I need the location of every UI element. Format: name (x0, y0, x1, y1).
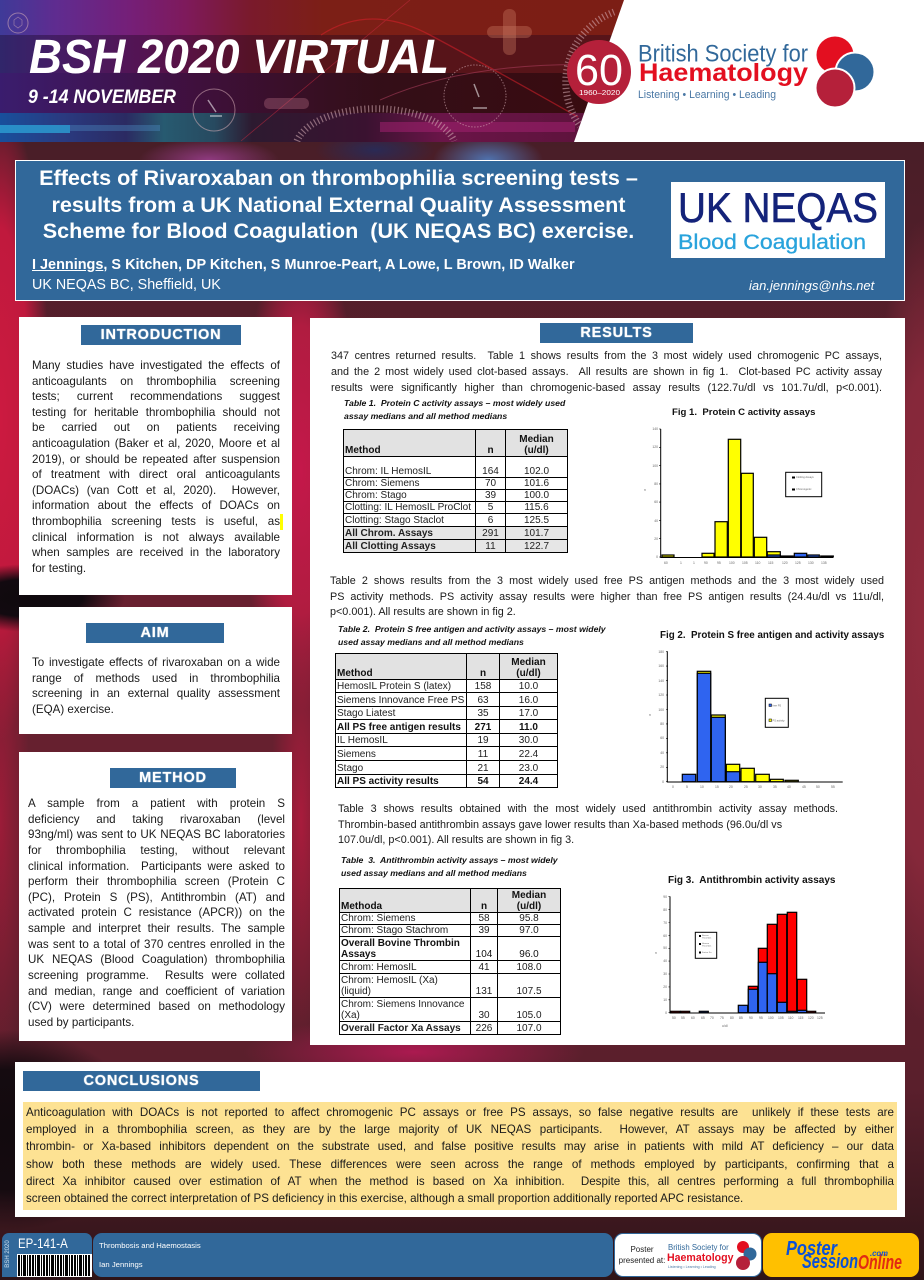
heading: aim (86, 623, 224, 643)
table 2: 16.0 (519, 695, 538, 706)
chart: figure 3 histogram: 55 (681, 1016, 685, 1020)
chart: figure 1 histogram: 80 (654, 482, 658, 486)
results paragraph 1: results were significantly higher than chromogenic-based assay results (122.7u/dl vs 101.7u/dl, p<0.001). (331, 382, 882, 394)
table 3: 104 (476, 949, 492, 960)
table 3: 95.8 (519, 913, 539, 924)
results paragraph 3: 107.0u/dl, p<0.001). All results are shown in fig 3. (338, 834, 574, 846)
chart: figure 1 histogram (644, 427, 834, 565)
highlight mark (280, 514, 283, 530)
poster title: Effects of Rivaroxaban on thrombophilia screening tests – (39, 165, 638, 190)
table 1: 291 (482, 528, 499, 539)
table 1: (u/dl) (524, 445, 549, 456)
introduction text: thrombophilia screening tests is useful, as (32, 515, 280, 528)
results paragraph 3: Thrombin-based antithrombin assays gave lower results than Xa-based methods (96.0u/dl vs (338, 818, 782, 830)
heading: introduction (81, 325, 241, 345)
email: ian.jennings@nhs.net (749, 278, 874, 293)
poster ID and barcode block: EP-141-A (18, 1236, 68, 1251)
chart: figure 3 histogram: 85 (739, 1016, 743, 1020)
chart: figure 2 histogram: 10 (700, 785, 704, 789)
table 2: Stago Liatest (337, 708, 395, 719)
chart: figure 3 histogram: 105 (778, 1016, 784, 1020)
chart: figure 3 histogram: 90 (663, 895, 667, 899)
introduction text: be carried out on patients receiving (32, 421, 280, 434)
results paragraph 2 (330, 575, 884, 618)
table 1: Clotting: Stago Staclot (345, 515, 444, 526)
table 2: 11.0 (519, 722, 538, 733)
UK NEQAS logo (671, 182, 885, 258)
conclusions text on yellow box: employed in a thrombophilia screen, as they are by the large majority of UK NEQAS participants. However, AT assays may be affected by either (26, 1123, 894, 1136)
table 2: 271 (475, 722, 491, 733)
table 1: 164 (482, 466, 499, 477)
results paragraph 2: Table 2 shows results from the 3 most widely used free PS antigen methods and the 3 most widely used (330, 575, 884, 587)
chart: figure 3 histogram: 10 (663, 998, 667, 1002)
introduction text: testing for heritable thrombophilia should not (32, 406, 280, 419)
chart: figure 1 histogram: 20 (654, 537, 658, 541)
table 1 caption: Table 1. Protein C activity assays – most widely used (344, 398, 565, 408)
chart: figure 3 histogram: 60 (663, 934, 667, 938)
chart: figure 2 histogram: PS activity (772, 718, 785, 722)
heading: introduction: INTRODUCTION (101, 327, 221, 343)
chart: figure 1 histogram: 110 (755, 561, 761, 565)
chart: figure 3 histogram: Bovine (702, 935, 709, 937)
chart: figure 3 histogram: Thrombin (702, 944, 712, 948)
method text: UK NEQAS (Blood Coagulation) thrombophilia (28, 953, 285, 966)
table 1: 11 (485, 541, 496, 552)
chart: figure 1 histogram: n (644, 488, 646, 492)
table 3: 107.5 (516, 986, 542, 997)
chart: figure 3 histogram (655, 895, 825, 1028)
chart: figure 2 histogram: 60 (660, 736, 664, 740)
chart: figure 2 histogram: 40 (660, 751, 664, 755)
method text: 93ng/ml) was sent to UK NEQAS BC laboratories (28, 828, 285, 841)
table 2: Stago (337, 763, 363, 774)
conclusions text on yellow box: thrombin- or Xa-based inhibitors dependent on the substrate used, and false positive results may arise in patients with mild AT deficiency – our data (26, 1140, 894, 1153)
chart: figure 2 histogram: 20 (660, 765, 664, 769)
table 2: Median (511, 656, 546, 668)
introduction text: clinical information is not always available (32, 531, 280, 544)
table 2: All PS free antigen results (337, 722, 461, 733)
chart: figure 2 histogram: 140 (658, 679, 664, 683)
table 1: 125.5 (524, 515, 549, 526)
chart: figure 3 histogram: 90 (749, 1016, 753, 1020)
BSH logo text: Haematology (639, 59, 808, 87)
method text: (PC), Protein S (PS), Antithrombin (AT) and (28, 891, 285, 904)
chart: figure 3 histogram: Human (702, 943, 710, 945)
chart: figure 2 histogram: 15 (715, 785, 719, 789)
BSH 60 years badge (567, 40, 631, 104)
method text: activated protein C resistance (APCR)) on the (28, 906, 285, 919)
chart: figure 2 histogram: 45 (802, 785, 806, 789)
BSH logo blobs (816, 36, 874, 108)
panel: introduction (19, 317, 292, 595)
poster presented at BSH box: Listening • Learning • Leading (668, 1265, 716, 1269)
BSH logo text: British Society for (638, 40, 808, 68)
event date: 9 -14 NOVEMBER (28, 86, 176, 108)
table 2 caption: Table 2. Protein S free antigen and activity assays – most widely (338, 624, 606, 634)
BSH 60 years badge: 60 (575, 46, 623, 95)
conclusions text on yellow box: Anticoagulation with DOACs is not reported to affect chromogenic PC assays or free PS assays, so false negative results are unlikely if these tests are (26, 1106, 894, 1119)
table 1: 101.7 (524, 528, 549, 539)
table 3: 108.0 (516, 962, 542, 973)
table 2: 17.0 (519, 708, 538, 719)
chart: figure 1 histogram: 120 (652, 445, 658, 449)
table 1: All Chrom. Assays (345, 528, 433, 539)
affiliation: UK NEQAS BC, Sheffield, UK (32, 277, 221, 293)
heading: results: RESULTS (580, 325, 653, 341)
poster title: Scheme for Blood Coagulation (UK NEQAS BC) exercise. (43, 218, 634, 243)
table 1: 5 (488, 502, 493, 513)
introduction text (32, 359, 280, 575)
table 3: Chrom: Siemens Innovance (341, 999, 464, 1010)
heading: aim: AIM (140, 625, 169, 641)
table 2: 23.0 (519, 763, 538, 774)
table 2: n (480, 668, 486, 678)
chart: figure 3 histogram: 80 (663, 908, 667, 912)
method text (28, 797, 285, 1029)
table 3 caption (341, 855, 558, 878)
method text: perform their thrombophilia screen (Protein C (28, 875, 285, 888)
chart: figure 1 histogram: 1 (693, 561, 695, 565)
chart: figure 1 histogram: 130 (808, 561, 814, 565)
table 1: 39 (485, 490, 496, 501)
chart: figure 2 histogram: 20 (729, 785, 733, 789)
heading: conclusions (23, 1071, 260, 1091)
chart: figure 2 histogram: 30 (758, 785, 762, 789)
table 3: 131 (476, 986, 492, 997)
table 3: Chrom: HemosIL (Xa) (341, 975, 438, 986)
table 2: 21 (477, 763, 489, 774)
table 3: 97.0 (519, 925, 539, 936)
heading: method (110, 768, 236, 788)
BSH logo text (638, 40, 808, 101)
introduction text: anticoagulants on thrombophilia screening (32, 375, 280, 388)
aim text: To investigate effects of rivaroxaban on a wide (32, 656, 280, 669)
panel: results (310, 318, 905, 1045)
chart: figure 3 histogram: 70 (710, 1016, 714, 1020)
aim text: (EQA) exercise. (32, 703, 114, 716)
poster presented at BSH box: Poster (630, 1245, 654, 1254)
poster title: results from a UK National External Quality Assessment (51, 192, 626, 216)
poster presented at BSH box: British Society for (668, 1243, 729, 1252)
chart: figure 2 histogram (649, 650, 843, 789)
introduction text: information about the effects of DOACs on (32, 499, 280, 512)
table 3: Chrom: HemosIL (341, 962, 417, 973)
table 3: 107.0 (516, 1023, 542, 1034)
table 3: 105.0 (516, 1010, 542, 1021)
table 2: IL HemosIL (337, 735, 388, 746)
chart: figure 3 histogram: 115 (798, 1016, 804, 1020)
poster presented at BSH box: presented at: (619, 1256, 665, 1265)
introduction text: anticoagulation (Baker et al, 2020, Moore et al (32, 437, 280, 450)
table 2 caption: used assay medians and all method medians (338, 637, 524, 647)
chart: figure 2 histogram: 25 (744, 785, 748, 789)
table 2: 63 (477, 695, 489, 706)
PosterSessionOnline logo: Poster (786, 1238, 838, 1260)
chart: figure 3 histogram: 95 (759, 1016, 763, 1020)
decorative science icons (8, 0, 614, 141)
chart: figure 3 histogram: 75 (720, 1016, 724, 1020)
table 3 caption: used assay medians and all method medians (341, 868, 527, 878)
BSH 60 years badge: 1960–2020 (579, 88, 620, 97)
results paragraph 2: p<0.001). All results are shown in fig 2. (330, 606, 516, 618)
table 3: Overall Bovine Thrombin Assays (341, 938, 460, 960)
chart: figure 1 histogram: 1 (680, 561, 682, 565)
authors: I Jennings, S Kitchen, DP Kitchen, S Munroe-Peart, A Lowe, L Brown, ID Walker (32, 257, 575, 273)
table 2: Siemens (337, 749, 376, 760)
chart: figure 1 histogram: 135 (821, 561, 827, 565)
chart: figure 3 histogram: 120 (808, 1016, 814, 1020)
PosterSessionOnline logo: .com (870, 1249, 888, 1258)
PosterSessionOnline logo: Session (802, 1251, 858, 1273)
table 1: Median (519, 434, 554, 445)
chart: figure 1 histogram: 90 (704, 561, 708, 565)
chart: figure 3 histogram: 110 (788, 1016, 794, 1020)
results paragraph 3: Table 3 shows results obtained with the most widely used antithrombin activity assay methods. (338, 803, 838, 815)
PosterSessionOnline logo (763, 1233, 919, 1277)
chart: figure 3 histogram: Thrombin (702, 936, 712, 940)
chart: figure 2 histogram: 180 (658, 650, 664, 654)
chart: figure 2 histogram: free PS (772, 704, 781, 708)
poster presented at BSH box: Haematology (667, 1252, 734, 1264)
panel: conclusions (15, 1062, 905, 1217)
table 2: 19 (477, 735, 489, 746)
conclusions text on yellow box: screen obtained the correct interpretation of PS deficiency in this exercise, although a small proportion additionally reported APC resistance. (26, 1192, 743, 1205)
chart: figure 2 histogram: 40 (787, 785, 791, 789)
chart: figure 1 histogram: 100 (729, 561, 735, 565)
table 3: 41 (478, 962, 490, 973)
table 2: 158 (475, 681, 491, 692)
chart: figure 2 histogram: 120 (658, 693, 664, 697)
table 2: All PS activity results (337, 776, 439, 787)
table 2: Method (337, 668, 373, 678)
aim text (32, 656, 280, 716)
table 1: 115.6 (524, 502, 549, 513)
aim text: screening in an external quality assessment (32, 687, 280, 700)
method text: screening programme. Results were collated (28, 969, 285, 982)
table 2: Siemens Innovance Free PS (337, 695, 464, 706)
introduction text: of treatment with direct oral anticoagulants (32, 468, 280, 481)
table 3: 30 (478, 1010, 490, 1021)
table 2: 35 (477, 708, 489, 719)
chart: figure 1 histogram: 40 (654, 519, 658, 523)
introduction text: Many studies have investigated the effects of (32, 359, 280, 372)
chart: figure 1 histogram: 115 (768, 561, 774, 565)
table 3: 58 (478, 913, 490, 924)
chart: figure 1 histogram: 140 (652, 427, 658, 431)
poster ID and barcode block: BSH 2020 (5, 1240, 11, 1268)
heading: method: METHOD (139, 770, 207, 786)
chart: figure 2 histogram: 100 (658, 708, 664, 712)
introduction text: (DOACs) (van Cott et al, 2020). However, (32, 484, 280, 497)
figure 3 title: Fig 3. Antithrombin activity assays (668, 875, 835, 886)
table 1 (343, 429, 568, 553)
method text: clinical information. Participants were asked to (28, 860, 285, 873)
table 1: 6 (488, 515, 493, 526)
table 3: (Xa) (341, 1010, 360, 1021)
chart: figure 3 histogram: Factor Xa (702, 951, 712, 954)
chart: figure 3 histogram: 20 (663, 985, 667, 989)
footer bar (2, 1233, 919, 1277)
table 3: Median (512, 890, 546, 901)
table 1: 122.7 (524, 541, 549, 552)
method text: A sample from a patient with protein S (28, 797, 285, 810)
panel: method (19, 752, 292, 1041)
chart: figure 2 histogram: 50 (816, 785, 820, 789)
PosterSessionOnline logo: Online (858, 1252, 902, 1274)
chart: figure 1 histogram: 105 (742, 561, 748, 565)
table 2: 24.4 (519, 776, 538, 787)
topic and author bar: Thrombosis and Haemostasis (99, 1241, 201, 1250)
introduction text: tests; current recommendations suggest (32, 390, 280, 403)
chart: figure 3 histogram: 0 (665, 1011, 667, 1015)
table 3: Methoda (341, 901, 382, 912)
table 1: n (487, 445, 494, 456)
method text: (CV) were determined based on methodology (28, 1000, 285, 1013)
method text: deficiency and taking rivaroxaban (level (28, 813, 285, 826)
table 1 caption: assay medians and all method medians (344, 411, 507, 421)
heading: results (540, 323, 693, 343)
topic and author bar: Ian Jennings (99, 1260, 143, 1269)
chart: figure 3 histogram: 60 (691, 1016, 695, 1020)
table 1: 102.0 (524, 466, 549, 477)
poster ID and barcode block (2, 1233, 92, 1277)
conclusions text on yellow box (23, 1102, 897, 1210)
table 3: 39 (478, 925, 490, 936)
chart: figure 2 histogram: 5 (686, 785, 688, 789)
poster title (39, 165, 638, 243)
chart: figure 3 histogram: n (655, 951, 657, 955)
table 2: 22.4 (519, 749, 538, 760)
chart: figure 1 histogram: 120 (782, 561, 788, 565)
chart: figure 2 histogram: 0 (672, 785, 674, 789)
chart: figure 3 histogram: 65 (701, 1016, 705, 1020)
table 1: Chrom: Siemens (345, 478, 419, 489)
white logo area (574, 0, 924, 142)
chart: figure 1 histogram: 0 (656, 555, 658, 559)
table 3: Chrom: Siemens (341, 913, 415, 924)
table 2: 30.0 (519, 735, 538, 746)
chart: figure 3 histogram: 50 (672, 1016, 676, 1020)
chart: figure 1 histogram: 125 (795, 561, 801, 565)
chart: figure 1 histogram: 95 (717, 561, 721, 565)
figure 2 title: Fig 2. Protein S free antigen and activity assays (660, 630, 884, 641)
conclusions text on yellow box: direct Xa inhibitor caused over estimation of AT when the method is based on Xa inhibition. Despite this, all centres performing a full thrombophilia (26, 1175, 894, 1188)
table 1: Clotting: IL HemosIL ProClot (345, 502, 471, 513)
table 2 caption (338, 624, 606, 647)
table 2: HemosIL Protein S (latex) (337, 681, 451, 692)
poster presented at BSH box (614, 1233, 762, 1277)
chart: figure 1 histogram: 60 (664, 561, 668, 565)
chart: figure 3 histogram: 70 (663, 921, 667, 925)
UK NEQAS logo: Blood Coagulation (678, 231, 866, 254)
chart: figure 2 histogram: 0 (662, 780, 664, 784)
panel: aim (19, 607, 292, 734)
conclusions text on yellow box: show both these methods are widely used. These differences were seen across the range of methods employed by participants, confirming that a (26, 1158, 894, 1171)
chart: figure 3 histogram: 80 (730, 1016, 734, 1020)
table 3: 96.0 (519, 949, 539, 960)
chart: figure 2 histogram: n (649, 713, 651, 717)
chart: figure 1 histogram: 100 (652, 464, 658, 468)
topic and author bar (93, 1233, 613, 1277)
chart: figure 2 histogram: 35 (773, 785, 777, 789)
introduction text: 2019), or should be repeated after suspension (32, 453, 280, 466)
results paragraph 3 (338, 803, 838, 846)
table 1: All Clotting Assays (345, 541, 436, 552)
results paragraph 1: 347 centres returned results. Table 1 shows results from the 3 most widely used chromogenic PC assays, (331, 350, 882, 362)
table 3: 226 (476, 1023, 492, 1034)
method text: used by participants. (28, 1016, 134, 1029)
title panel (15, 160, 905, 301)
results paragraph 1 (331, 350, 882, 394)
results paragraph 1: and the 2 most widely used clot-based assays. All results are shown in fig 1. Clot-based PC activity assay (331, 366, 882, 378)
chart: figure 3 histogram: 40 (663, 959, 667, 963)
chart: figure 2 histogram: 160 (658, 664, 664, 668)
chart: figure 2 histogram: 55 (831, 785, 835, 789)
figure 1 title: Fig 1. Protein C activity assays (672, 407, 815, 418)
event title: BSH 2020 VIRTUAL (29, 31, 449, 84)
chart: figure 2 histogram: 80 (660, 722, 664, 726)
table 3: (u/dl) (517, 901, 541, 912)
table 2: 54 (477, 776, 489, 787)
table 1: Method (345, 445, 381, 456)
table 1: 100.0 (524, 490, 549, 501)
method text: for thrombophilia testing, without relevant (28, 844, 285, 857)
introduction text: when samples are received in the laboratory (32, 546, 280, 559)
table 3 (339, 888, 561, 1035)
table 1 caption (344, 398, 566, 421)
table 3: (liquid) (341, 986, 371, 997)
table 2: 11 (478, 749, 488, 760)
method text: sample and interpret their results. The sample (28, 922, 285, 935)
results paragraph 2: PS activity methods. PS activity assay results were higher than free PS antigen results (24.4u/dl vs 11u/dl, (330, 591, 884, 603)
method text: and median, range and coefficient of variation (28, 985, 285, 998)
aim text: range of methods used in thrombophilia (32, 672, 280, 685)
table 3: n (481, 901, 487, 912)
table 1: Chrom: IL HemosIL (345, 466, 431, 477)
table 2: (u/dl) (516, 668, 541, 678)
method text: was sent to a total of 370 centres enrolled in the (28, 938, 285, 951)
chart: figure 3 histogram: 100 (768, 1016, 774, 1020)
chart: figure 1 histogram: Chromogenic (796, 487, 812, 491)
table 1: Chrom: Stago (345, 490, 407, 501)
table 3: Overall Factor Xa Assays (341, 1023, 461, 1034)
introduction text: for testing. (32, 562, 86, 575)
chart: figure 3 histogram: 30 (663, 972, 667, 976)
header banner (0, 0, 924, 142)
table 2: 10.0 (519, 681, 538, 692)
BSH logo text: Listening • Learning • Leading (638, 89, 776, 101)
chart: figure 1 histogram: Clotting Assays (796, 475, 814, 479)
chart: figure 3 histogram: 50 (663, 946, 667, 950)
table 3 caption: Table 3. Antithrombin activity assays – most widely (341, 855, 558, 865)
table 1: 70 (485, 478, 496, 489)
table 3: Chrom: Stago Stachrom (341, 925, 448, 936)
chart: figure 1 histogram: 60 (654, 500, 658, 504)
chart: figure 3 histogram: u/dl (722, 1024, 728, 1028)
table 2 (335, 653, 558, 788)
heading: conclusions: CONCLUSIONS (84, 1073, 199, 1089)
table 1: 101.6 (524, 478, 549, 489)
chart: figure 3 histogram: 125 (817, 1016, 823, 1020)
